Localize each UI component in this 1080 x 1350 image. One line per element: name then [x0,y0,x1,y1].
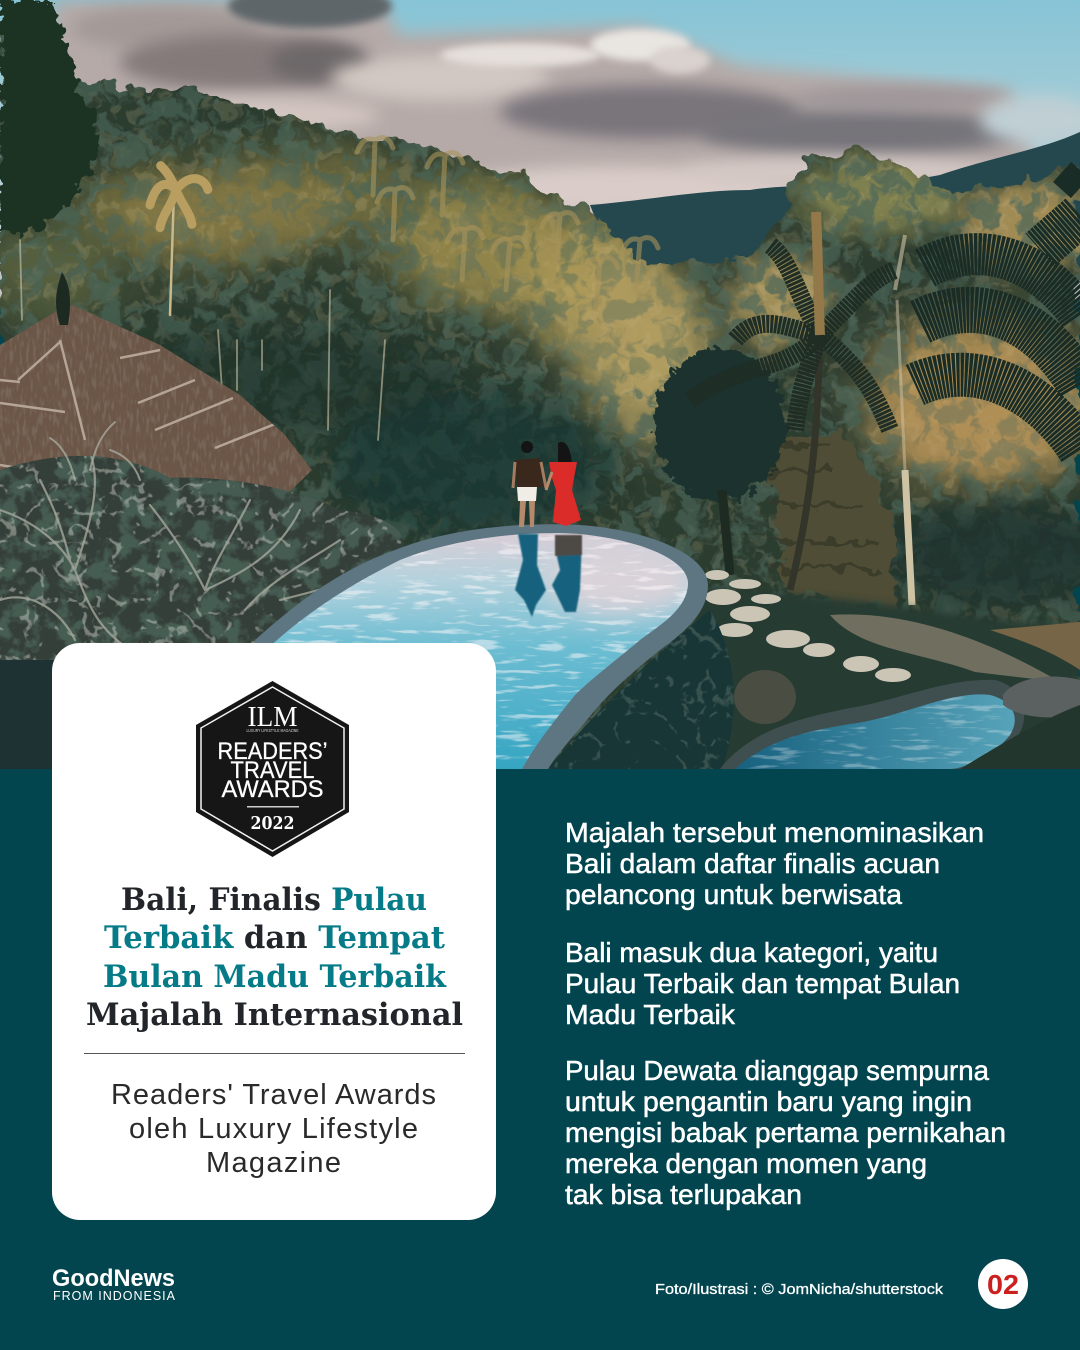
card heading: Bali, Finalis Pulau [121,882,427,918]
paragraph three [565,1055,1006,1210]
page number badge: 02 [987,1269,1019,1300]
award badge [196,681,349,857]
card heading: Majalah Internasional [86,997,463,1033]
reflection of couple [515,534,582,617]
page number badge [978,1259,1028,1309]
photo: bali infinity pool [0,0,1080,770]
card heading: Bulan Madu Terbaik [103,959,447,995]
dark tree top left [0,0,98,235]
paragraph two: Madu Terbaik [565,999,736,1030]
logo: GoodNews from Indonesia: FROM INDONESIA [53,1289,176,1303]
card subheading: oleh Luxury Lifestyle [129,1113,418,1145]
paragraph three: untuk pengantin baru yang ingin [565,1086,972,1117]
rock wall under pool [548,610,734,769]
big palm fronds right edge [915,170,1080,450]
paragraph two: Bali masuk dua kategori, yaitu [565,937,938,968]
card subheading: Readers' Travel Awards [111,1079,436,1111]
frangipani tree foreground [0,456,404,769]
card heading [86,882,463,1033]
paragraph two [565,937,960,1030]
paragraph one: pelancong untuk berwisata [565,879,902,910]
award badge: 2022 [250,813,294,834]
boulder right [1003,676,1080,718]
couple standing at pool edge [513,441,581,527]
small lower plunge pool [720,680,1030,770]
paragraph three: tak bisa terlupakan [565,1179,802,1210]
paragraph two: Pulau Terbaik dan tempat Bulan [565,968,960,999]
sky with clouds [0,0,1080,300]
paragraph one: Majalah tersebut menominasikan [565,817,984,848]
paragraph one [565,817,984,910]
dark round tree centre right [654,349,786,501]
round boulder [734,670,796,724]
paragraph three: mengisi babak pertama pernikahan [565,1117,1006,1148]
award badge: ILM [248,701,298,733]
logo: GoodNews from Indonesia: GoodNews [52,1265,175,1292]
award badge: READERS’ [218,738,328,765]
award badge: LUXURY LIFESTYLE MAGAZINE [246,728,298,733]
palm tree centre right [690,212,895,590]
card subheading [111,1079,436,1179]
card heading: Terbaik dan Tempat [104,920,446,956]
teal lower band [0,769,1080,1350]
award badge: TRAVEL [230,757,314,784]
twigs over hut [50,422,140,480]
paragraph three: mereka dengan momen yang [565,1148,927,1179]
terraced hillside [765,430,895,610]
forest hillside [0,0,1080,769]
card subheading: Magazine [206,1147,341,1179]
distant mountains [590,132,1080,280]
palm trees on the ridge [20,138,658,440]
paragraph one: Bali dalam daftar finalis acuan [565,848,940,879]
foreground plants bottom right [960,705,1080,769]
photo credit: Foto/Ilustrasi : © JomNicha/shutterstock [655,1281,944,1298]
infinity pool water [250,524,710,770]
paragraph three: Pulau Dewata dianggap sempurna [565,1055,989,1086]
tall tree trunk upper right [895,235,912,605]
thatched hut roof [0,305,312,492]
card panel [52,643,496,1220]
award badge: AWARDS [222,776,324,803]
ground and stepping stone path [690,570,1080,769]
